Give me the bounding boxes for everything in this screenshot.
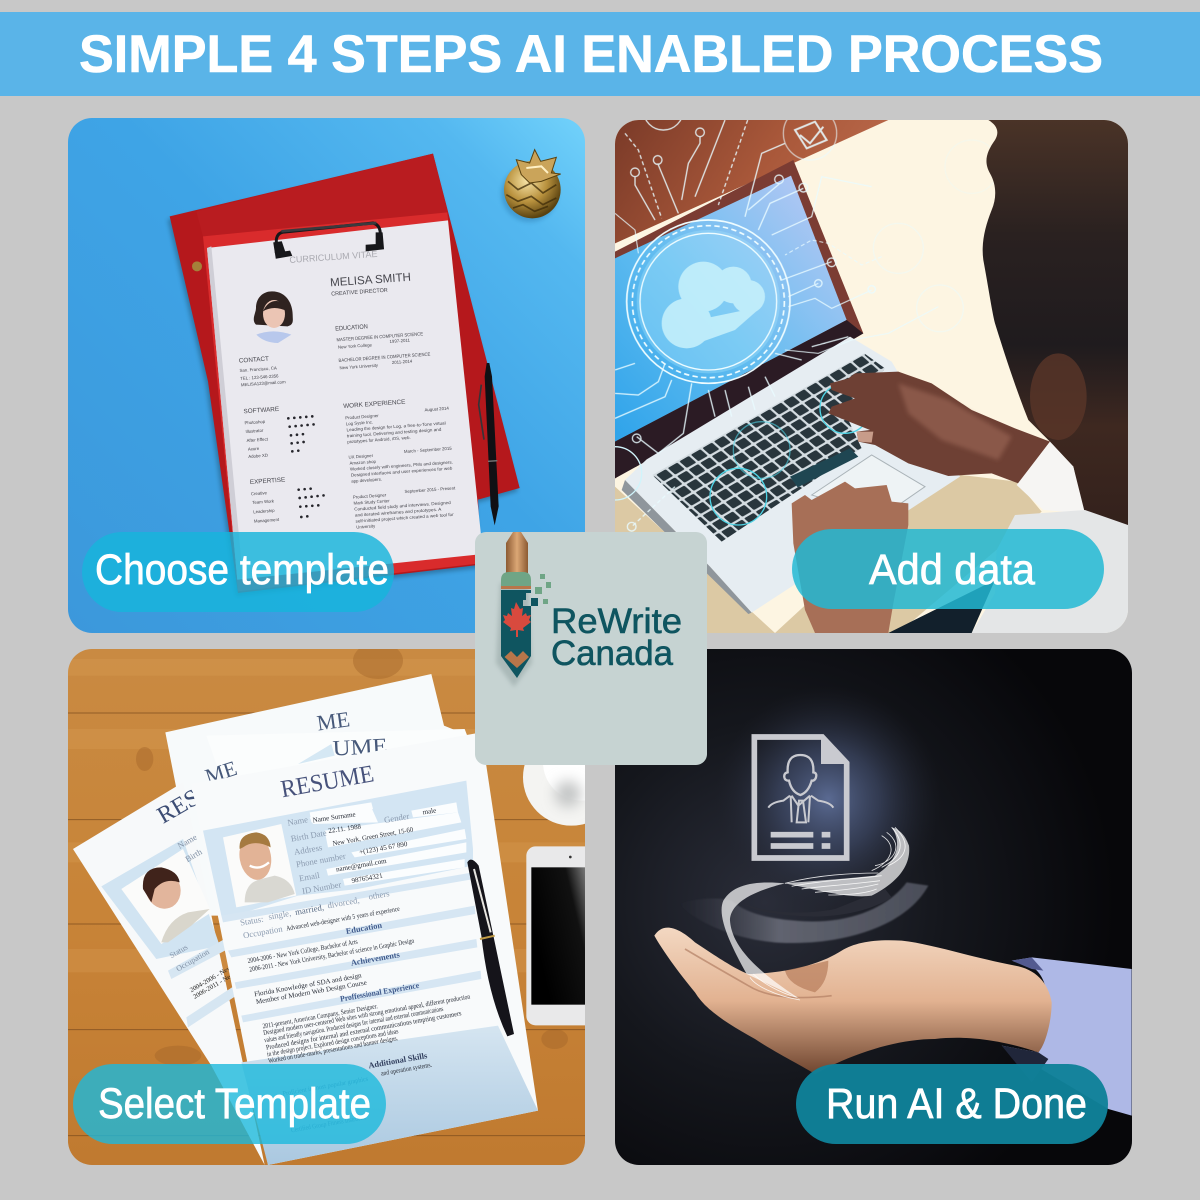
front sheet text: Proffessional Experience (339, 981, 420, 1004)
resume sheet: Photoshop (244, 419, 266, 425)
front sheet text: Member of Modern Web Design Course (255, 979, 367, 1006)
step label: run AI and done (796, 1064, 1108, 1144)
resume sheet: New York University (339, 363, 379, 370)
resume sheet: After Effect (246, 436, 269, 443)
front resume sheet (191, 732, 538, 1165)
front sheet text: Status: (239, 914, 264, 928)
open hand (654, 928, 1052, 1074)
portrait (254, 291, 293, 343)
resume sheet: 2011-2014 (392, 359, 413, 365)
resume sheet: Product Designer (353, 492, 387, 500)
panel: choose template photo (68, 118, 585, 633)
resume sheet: training tool. Delivering and testing design and (347, 427, 442, 438)
step label: add data: Add data (869, 546, 1035, 594)
phone (526, 846, 585, 1026)
resume sheet: New York College (338, 342, 373, 350)
front sheet text: 987654321 (351, 872, 384, 885)
front sheet text: and operation systems. (380, 1061, 433, 1078)
logo wordmark: ReWrite (551, 601, 682, 641)
typing hand (828, 372, 1050, 483)
coffee cup and saucer (523, 765, 585, 826)
front sheet text: 2004-2006 - New York College, Bachelor of Arts (247, 938, 359, 965)
lower shirt sleeve (888, 510, 1128, 633)
front sheet text: married, (294, 902, 325, 917)
front sheet text: Birth Date (290, 827, 328, 844)
glowing rings (678, 882, 928, 943)
front sheet text: single, (268, 908, 292, 922)
resume sheet: BACHELOR DEGREE IN COMPUTER SCIENCE (338, 352, 431, 363)
cloud in glowing circle (627, 220, 790, 383)
front sheet text: Education (345, 921, 383, 936)
left resume sheet: Occupation (174, 947, 211, 973)
panel: add data photo (588, 90, 1128, 633)
clipboard clip (274, 223, 383, 258)
wooden surface behind laptop (615, 120, 888, 243)
step label: choose template (82, 532, 394, 612)
resume sheet: Leading the design for Log, a free-to-Tone virtual (346, 420, 446, 432)
back resume sheets (165, 674, 485, 916)
resume sheet: Leadership (253, 508, 275, 514)
red folder (168, 154, 520, 596)
icon: pencil with maple leaf (496, 532, 551, 687)
pen (479, 363, 499, 525)
logo wordmark: Canada (551, 633, 673, 673)
front sheet text: Worked on trade-marks, presentations and banner designs. (268, 1034, 399, 1065)
resume sheet: August 2014 (424, 406, 450, 412)
front sheet text: Address (293, 842, 324, 857)
step label: run AI and done: Run AI & Done (826, 1080, 1087, 1128)
resume sheet: self-initiated project which created a web tool for (355, 512, 454, 524)
front sheet text: 2006-2011 - New York University, Bachelor of science in Graphic Design (249, 937, 415, 974)
front sheet text: Email (298, 870, 321, 883)
resume sheet: CONTACT (239, 356, 269, 365)
left resume sheet (73, 782, 265, 1165)
white ribbon (722, 827, 909, 1000)
resume sheet: app developers. (351, 477, 382, 484)
resume sheet: Conducted field study and interviews. Designed (354, 500, 451, 512)
title banner (0, 12, 1200, 96)
front sheet text: values and friendly navigation. Produced designs for internal and external communications (264, 1005, 444, 1044)
front sheet text: 22.11. 1988 (328, 822, 362, 835)
resume sheet: Axure (248, 446, 260, 452)
resume sheet: Log Sysle Inc. (346, 419, 373, 426)
step label: choose template: Choose template (95, 546, 389, 594)
person head and shoulder (983, 120, 1128, 528)
resume sheet: and iterated wireframes and prototypes. A (355, 507, 442, 518)
left resume sheet: 2004-2006 - New (189, 964, 233, 994)
logo wordmark (551, 601, 682, 673)
resume sheet: Illustrator (245, 428, 264, 434)
left sheet portrait (140, 864, 210, 942)
front sheet text: +(123) 45 67 890 (359, 840, 409, 856)
laptop base and keyboard (622, 337, 960, 614)
wood planks and knots (68, 642, 585, 1136)
panel: run AI and done photo (615, 649, 1135, 1169)
gold pineapple ornament (501, 150, 561, 222)
resume sheet: TEL : 123-546-2356 (240, 373, 279, 381)
keyboard holographic rings (588, 383, 882, 525)
front sheet text: ID Number (301, 879, 342, 896)
step label: add data (792, 529, 1104, 609)
step label: select template: Select Template (98, 1080, 371, 1128)
laptop screen (615, 160, 863, 478)
resume sheet: 1997-2011 (389, 338, 411, 344)
resume icon (754, 734, 850, 858)
fountain pen (467, 860, 514, 1036)
front sheet text: Produced designs for internal and external communications tempting customers (265, 1009, 462, 1052)
front sheet text: Name Surname (312, 810, 356, 824)
resume sheet: UX Designer (348, 453, 374, 460)
resume sheet: MELISA123@mail.com (241, 379, 286, 387)
resume sheet: Mark Study Center (353, 498, 390, 506)
front sheet text: Gender (383, 811, 410, 825)
sleeve (1002, 957, 1132, 1116)
front sheet text: Designed modern user-centered Web sites with strong emotional appeal, different production (263, 993, 471, 1037)
resume sheet: Creative (251, 490, 268, 496)
resume sheet: San. Francisco, CA (239, 365, 277, 373)
resume sheet: Team Work (252, 498, 275, 505)
resume sheet: SOFTWARE (243, 406, 279, 415)
resume sheet: Product Designer (345, 413, 379, 420)
left resume sheet: RES (153, 785, 204, 829)
resume sheet: Worked closely with engineers, PMs and designers. (350, 459, 453, 472)
left resume sheet: Status (168, 943, 189, 960)
resume sheet: EDUCATION (335, 323, 368, 333)
front sheet text (239, 760, 471, 1134)
resume sheet: EXPERTISE (250, 477, 285, 486)
resume sheet: University (356, 523, 376, 530)
front sheet text: divorced, (327, 895, 360, 910)
desk (615, 473, 1042, 633)
front sheet text: Additional Skills (368, 1051, 429, 1070)
back resume sheets: ME (315, 706, 351, 736)
title banner: SIMPLE 4 STEPS AI ENABLED PROCESS (79, 25, 1103, 84)
front sheet text: Name (287, 814, 309, 828)
resume sheet: September 2015 - Present (404, 485, 456, 494)
back resume sheets: ME (202, 756, 240, 789)
front sheet text: others (368, 888, 391, 902)
front sheet text: Proficient in most popular graphics (282, 1076, 369, 1098)
left resume sheet: Birth (183, 846, 204, 864)
front sheet text: 2011-present, American Company, Senior Designer. (262, 1002, 378, 1030)
resume sheet: Designed interfaces and user experiences for web (351, 466, 453, 478)
front sheet text: New York, Green Street, 15-60 (332, 825, 414, 848)
front sheet text: RESUME (279, 760, 376, 803)
skill dots (288, 416, 324, 517)
front sheet text: Achievements (350, 950, 401, 968)
resume sheet: prototypes for Android, iOS, web. (347, 435, 411, 444)
resume sheet: Management (254, 517, 280, 524)
blue glow (740, 704, 922, 881)
front sheet text: Phone number (295, 851, 347, 869)
left resume sheet: Name (176, 832, 199, 851)
resume sheet: Amazon shop (349, 459, 377, 466)
front sheet text: Florida Knowledge of SDA and design (254, 971, 363, 998)
lower hand (792, 482, 908, 633)
resume sheet: WORK EXPERIENCE (343, 399, 406, 410)
resume sheet: CURRICULUM VITAE (289, 249, 378, 265)
resume sheet: CREATIVE DIRECTOR (331, 288, 388, 298)
front sheet text: male (422, 807, 437, 816)
resume sheet: MASTER DEGREE IN COMPUTER SCIENCE (336, 331, 423, 342)
front sheet text: Advanced web-designer with 5 years of experience (286, 905, 400, 933)
front sheet text: Certified Group Fitness Instructor (290, 1114, 368, 1134)
resume sheet (207, 220, 483, 580)
logo card (475, 532, 707, 765)
front sheet text: in the design project. Explored design conceptions and ideas (266, 1027, 399, 1058)
holographic circuit lines (615, 90, 998, 531)
resume sheet: MELISA SMITH (330, 271, 411, 289)
back resume sheets: UME (332, 733, 388, 761)
panel: select template photo (68, 642, 620, 1165)
resume sheet: March - September 2015 (404, 446, 452, 454)
front sheet text: name@gmail.com (335, 857, 388, 874)
white shirt cuff (1017, 442, 1085, 513)
resume sheet: Adobe XD (248, 453, 268, 459)
man portrait (236, 832, 295, 902)
front sheet text: Occupation (242, 923, 284, 940)
step label: select template (73, 1064, 386, 1144)
left resume sheet: 2006-2011 - New (192, 971, 236, 1001)
